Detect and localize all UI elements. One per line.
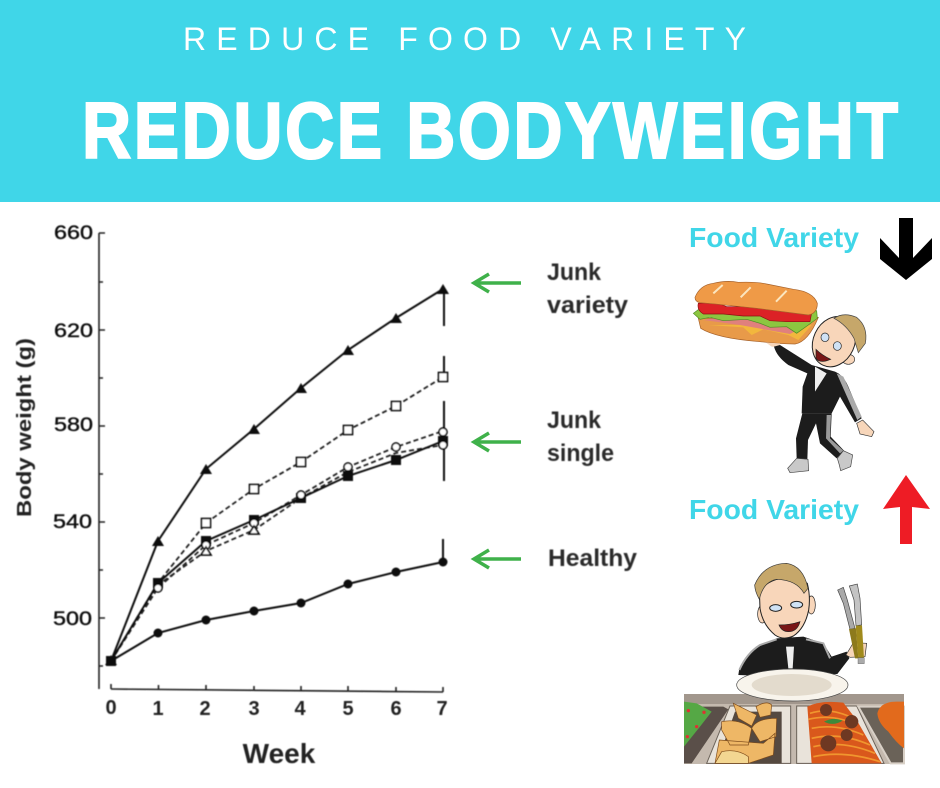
eyes and mouth <box>821 333 829 342</box>
y axis labels: 620 <box>54 321 93 342</box>
green arrow: healthy <box>474 550 521 568</box>
y axis labels: 500 <box>53 609 92 630</box>
plate <box>737 669 848 701</box>
tongs and hand <box>838 584 867 664</box>
bread tray <box>707 706 791 763</box>
jacket <box>738 637 849 677</box>
hair <box>834 315 866 353</box>
label: healthy: Healthy <box>548 545 638 572</box>
buffet counter <box>684 694 904 764</box>
error bars <box>443 289 444 562</box>
hair <box>755 563 808 599</box>
jacket and arm <box>774 345 862 422</box>
title: REDUCE BODYWEIGHT <box>82 86 898 175</box>
label: junk variety: Junk <box>547 259 602 286</box>
green arrow: junk single <box>474 433 521 451</box>
y axis labels <box>53 223 93 630</box>
markers: filled squares <box>106 436 448 666</box>
markers: healthy filled circles <box>154 558 448 638</box>
heading: food variety down: Food Variety <box>689 222 859 253</box>
head <box>759 578 809 638</box>
x axis labels: 5 <box>342 698 354 720</box>
x axis labels: 3 <box>248 698 260 720</box>
x axis labels: 2 <box>199 698 211 720</box>
green arrow: junk variety <box>474 274 521 292</box>
salad tray <box>684 707 728 763</box>
line chart: body weight by week <box>14 223 449 769</box>
y axis labels: 660 <box>54 223 93 244</box>
y axis labels: 580 <box>54 415 93 436</box>
x axis labels: 7 <box>436 698 448 720</box>
x axis labels: 0 <box>105 697 117 719</box>
x axis title: Week <box>243 738 316 769</box>
x axis labels: 1 <box>152 698 164 720</box>
legs <box>796 413 844 460</box>
shoes <box>788 451 853 473</box>
y axis <box>99 233 105 689</box>
label: junk single: Junk <box>547 407 602 434</box>
dashed series <box>111 377 443 661</box>
header banner <box>0 0 940 202</box>
solid series <box>111 289 443 661</box>
markers: open squares <box>202 372 448 528</box>
x axis labels <box>105 697 448 720</box>
label: junk variety: variety <box>547 292 629 319</box>
x axis labels: 4 <box>294 698 306 720</box>
subtitle: REDUCE FOOD VARIETY <box>183 21 746 57</box>
illustration: man holding sandwich <box>693 281 874 473</box>
hand <box>857 420 874 437</box>
label: junk single: single <box>547 440 614 467</box>
meat tray <box>858 707 904 763</box>
y axis title: Body weight (g) <box>14 338 36 517</box>
head <box>804 309 864 374</box>
series labels <box>547 259 638 572</box>
x axis labels: 6 <box>390 698 402 720</box>
markers: junk variety triangles <box>105 284 449 665</box>
ears <box>758 605 767 623</box>
y axis labels: 540 <box>53 512 92 533</box>
sandwich <box>693 281 818 344</box>
illustration: man at buffet <box>684 563 904 764</box>
x axis <box>111 684 443 692</box>
icon: red up arrow <box>883 475 930 544</box>
pasta tray <box>797 706 884 763</box>
eyes and mouth <box>770 605 782 611</box>
icon: black down arrow <box>880 218 932 280</box>
heading: food variety up: Food Variety <box>689 494 859 525</box>
hand under sandwich <box>766 343 780 347</box>
markers: open circles <box>154 428 447 592</box>
ear <box>842 354 855 364</box>
